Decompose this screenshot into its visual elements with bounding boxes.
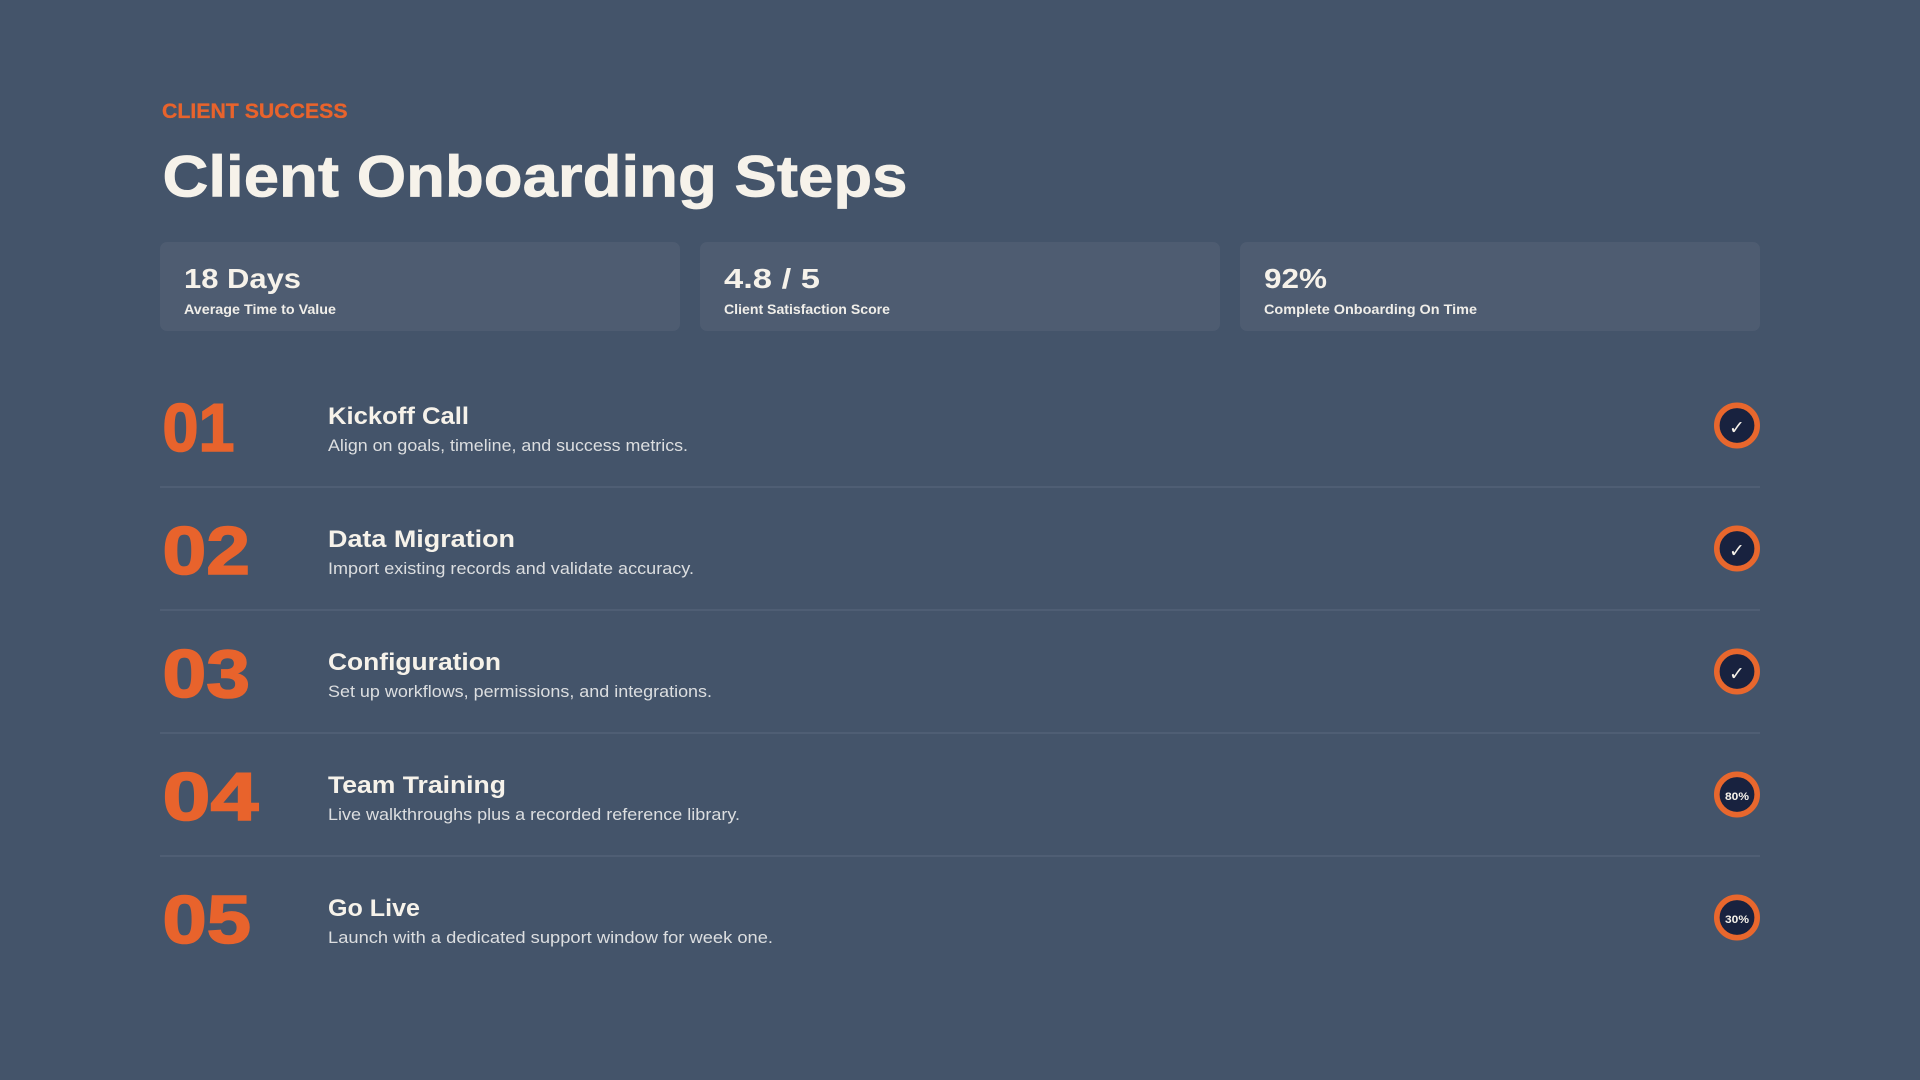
stat card: average time to value: 18 Days <box>184 263 301 294</box>
eyebrow label: CLIENT SUCCESS <box>162 100 348 123</box>
step description: Live walkthroughs plus a recorded reference library. <box>328 805 740 824</box>
status: 30 percent <box>1717 897 1757 938</box>
status: complete: ✓ <box>1729 663 1745 685</box>
stat card: complete onboarding on time: 92% <box>1264 263 1327 294</box>
status: 80 percent: 80% <box>1725 791 1749 803</box>
step number 02: 02 <box>162 513 250 589</box>
step 05: go live <box>162 882 1757 958</box>
step number 03: 03 <box>162 636 250 712</box>
step heading: Team Training <box>328 772 506 799</box>
step number 01: 01 <box>162 390 234 466</box>
status: 30 percent: 30% <box>1725 914 1749 926</box>
stat card: average time to value: Average Time to Value <box>184 301 336 317</box>
status: complete: ✓ <box>1729 540 1745 562</box>
step heading: Kickoff Call <box>328 403 469 430</box>
status: complete: ✓ <box>1729 417 1745 439</box>
stat card: complete onboarding on time <box>1240 242 1760 331</box>
step number 04: 04 <box>162 759 259 835</box>
step heading: Go Live <box>328 895 420 922</box>
step heading: Configuration <box>328 649 501 676</box>
step number 05: 05 <box>162 882 251 958</box>
stat card: complete onboarding on time: Complete Onboarding On Time <box>1264 301 1477 317</box>
stat card: client satisfaction score <box>700 242 1220 331</box>
step description: Import existing records and validate accuracy. <box>328 559 694 578</box>
step 02: data migration <box>162 513 1757 589</box>
status: complete <box>1717 405 1757 446</box>
step heading: Data Migration <box>328 526 515 553</box>
stat card: client satisfaction score: 4.8 / 5 <box>724 263 820 294</box>
step 01: kickoff call <box>162 390 1757 466</box>
panel: stat cards <box>160 242 1760 331</box>
status: 80 percent <box>1717 774 1757 815</box>
status: complete <box>1717 651 1757 692</box>
step description: Launch with a dedicated support window for week one. <box>328 928 773 947</box>
title: Client Onboarding Steps <box>162 144 908 210</box>
step 04: team training <box>162 759 1757 835</box>
stat card: client satisfaction score: Client Satisfaction Score <box>724 301 890 317</box>
step 03: configuration <box>162 636 1757 712</box>
step description: Align on goals, timeline, and success metrics. <box>328 436 688 455</box>
step description: Set up workflows, permissions, and integrations. <box>328 682 712 701</box>
status: complete <box>1717 528 1757 569</box>
stat card: average time to value <box>160 242 680 331</box>
